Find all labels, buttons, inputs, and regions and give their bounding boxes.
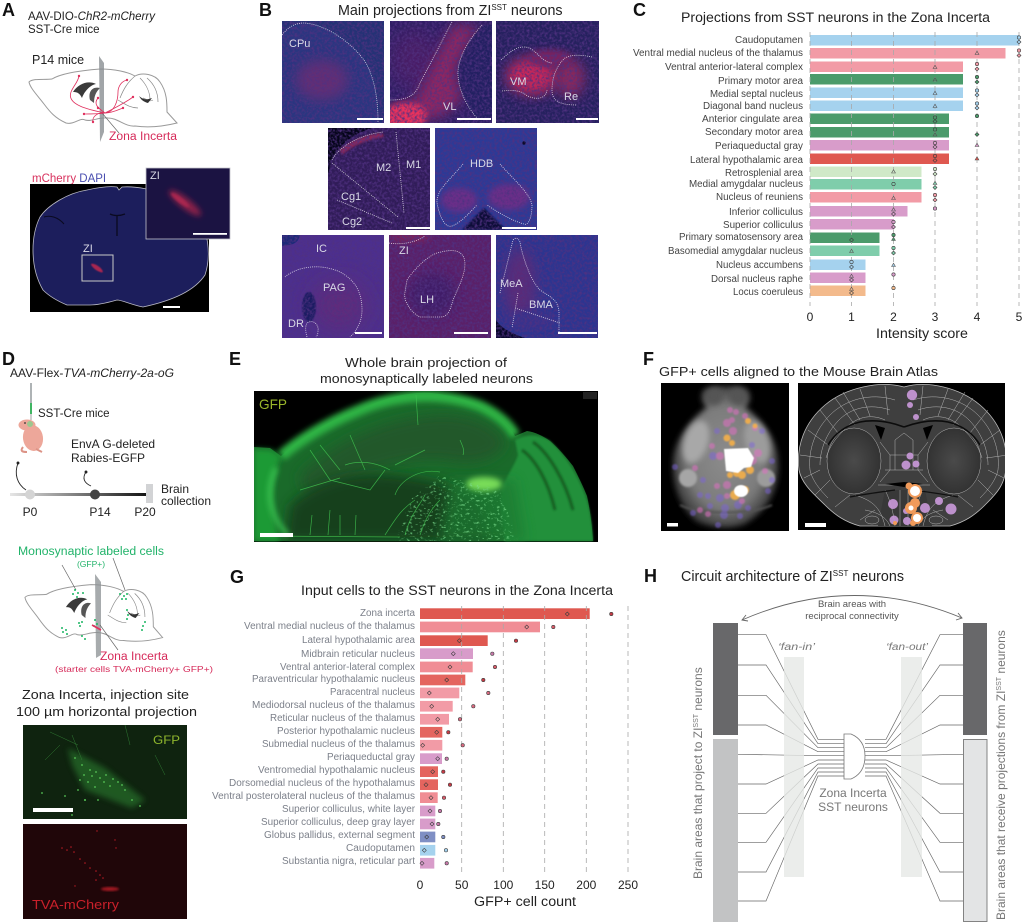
label: reciprocal connectivity: reciprocal connectivity [805, 611, 899, 622]
micrograph: IC PAG DR [282, 235, 384, 338]
micrograph: VL: VL [443, 101, 456, 113]
region labels: Superior colliculus [723, 220, 803, 231]
timeline labels: P0 [23, 505, 38, 519]
heading: horizontal projection: 100 µm horizontal projection [16, 704, 197, 719]
region labels: Dorsomedial nucleus of the hypothalamus [229, 778, 415, 789]
region labels: Ventromedial hypothalamic nucleus [258, 765, 415, 776]
micrograph: ZI LH: LH [420, 294, 434, 306]
panel A: viral tracing setup and injection site [2, 0, 230, 312]
micrograph: MeA BMA: BMA [529, 299, 554, 311]
micrograph: IC PAG DR: PAG [323, 282, 345, 294]
region labels: Zona incerta [360, 608, 416, 619]
x axis tick labels: 4 [974, 310, 981, 324]
region labels: Posterior hypothalamic nucleus [277, 726, 415, 737]
region labels: Diagonal band nucleus [703, 101, 803, 112]
vertical label: left: Brain areas that project to ZI [691, 728, 705, 879]
individual animal markers [850, 36, 1021, 295]
region labels: Lateral hypothalamic area [302, 635, 416, 646]
connection lines: fan-in [738, 635, 844, 901]
region labels: Inferior colliculus [729, 207, 803, 218]
micrograph: ZI LH: ZI [399, 245, 409, 257]
micrograph inset: zona incerta: ZI [150, 170, 160, 182]
connection lines: fan-out [865, 635, 963, 901]
region labels: Mediodorsal nucleus of the thalamus [252, 700, 415, 711]
panel B title: Main projections from ZI [338, 3, 491, 19]
region labels: Dorsal nucleus raphe [711, 274, 804, 285]
panel letter G: G [230, 567, 244, 587]
panel B title: neurons [507, 3, 563, 19]
panel E: whole brain GFP projection [229, 349, 598, 542]
micrograph: IC PAG DR: DR [288, 318, 304, 330]
region labels: Nucleus accumbens [716, 260, 803, 271]
label: Zona Incerta starter: Zona Incerta [100, 651, 169, 663]
block: upper left brain areas [713, 623, 738, 735]
region labels: Ventral anterior-lateral complex [665, 62, 803, 73]
region labels: Retrosplenial area [725, 168, 804, 179]
micrograph: M1 M2 Cg1 Cg2: M1 [406, 159, 421, 171]
region labels: Ventral medial nucleus of the thalamus [244, 621, 415, 632]
region labels: Ventral anterior-lateral complex [280, 662, 415, 673]
region labels: Paracentral nucleus [330, 687, 415, 698]
label: ZI on section: ZI [83, 243, 93, 255]
block: lower left brain areas [713, 739, 738, 922]
panel H: circuit architecture diagram [644, 566, 1008, 922]
virus and mouse line text: AAV-DIO-ChR2-mCherry [28, 11, 155, 23]
timeline labels: P14 [89, 505, 111, 519]
panel H title: SST [833, 569, 848, 578]
region labels: Primary motor area [718, 76, 804, 87]
x axis tick labels: 5 [1016, 310, 1023, 324]
label: GFP on micrograph: GFP [153, 733, 180, 747]
micrograph: HDB [435, 128, 537, 230]
arrow: injection at P0 [16, 462, 26, 490]
panel E title line 1: Whole brain projection of [345, 355, 507, 370]
region labels: Midbrain reticular nucleus [301, 649, 415, 660]
x axis tick labels: 200 [576, 878, 597, 892]
panel letter E: E [229, 349, 241, 369]
vertical label: right: neurons [994, 630, 1008, 677]
region labels: Substantia nigra, reticular part [282, 856, 415, 867]
region labels: Superior colliculus, deep gray layer [261, 817, 416, 828]
region labels: Secondary motor area [705, 127, 804, 138]
region labels: Periaqueductal gray [327, 752, 415, 763]
region labels: Lateral hypothalamic area [690, 155, 804, 166]
region labels: Basomedial amygdalar nucleus [668, 246, 803, 257]
icon: sagittal brain with labeled cells [25, 558, 163, 658]
label: brain collection: collection [161, 494, 211, 508]
region labels: Paraventricular hypothalamic nucleus [252, 674, 415, 685]
x axis tick labels: 150 [535, 878, 555, 892]
micrograph: M1 M2 Cg1 Cg2: Cg2 [342, 216, 362, 228]
micrograph: GFP injection site [23, 725, 187, 819]
panel letter C: C [633, 0, 646, 20]
micrograph: MeA BMA [496, 235, 598, 338]
label: Zona Incerta SST neurons: SST neurons [818, 800, 888, 814]
region labels: Globus pallidus, external segment [264, 830, 415, 841]
x axis tick labels [807, 310, 1023, 324]
panel D: rabies tracing workflow [2, 349, 213, 919]
vertical label: right: SST [996, 676, 1003, 691]
label: EnvA rabies: EnvA G-deleted [71, 437, 155, 451]
x axis tick labels: 0 [807, 310, 814, 324]
panel letter B: B [259, 0, 272, 20]
x axis title: Intensity score [876, 326, 968, 341]
image: coronal atlas overlay [798, 383, 1008, 530]
vertical label: right: Brain areas that receive projections from ZI [994, 691, 1008, 920]
dashed grid lines [462, 606, 628, 872]
icon: neonatal mouse pup [18, 420, 45, 452]
panel G title: Input cells to the SST neurons in the Zona Incerta [301, 583, 614, 598]
x axis tick labels: 100 [493, 878, 514, 892]
x axis tick labels: 250 [618, 878, 638, 892]
region labels: Submedial nucleus of the thalamus [262, 739, 415, 750]
region labels [633, 35, 804, 298]
label: Zona Incerta: Zona Incerta [109, 131, 178, 143]
label: SST-Cre mice: SST-Cre mice [38, 408, 110, 420]
panel letter H: H [644, 566, 657, 586]
label: fan-in: ‘fan-in’ [778, 642, 816, 653]
micrograph: VM and Re: Re [564, 91, 578, 103]
label: monosynaptic cells: Monosynaptic labeled cells [18, 546, 164, 558]
virus and mouse line text: SST-Cre mice [28, 24, 100, 36]
image: horizontal brain heatmap [661, 383, 789, 531]
label: starter cells: (starter cells TVA-mCherry+ GFP+) [55, 664, 213, 674]
legend: mCherry DAPI: mCherry DAPI [32, 173, 106, 185]
micrograph: TVA-mCherry [23, 824, 187, 919]
micrograph: M1 M2 Cg1 Cg2: Cg1 [341, 191, 361, 203]
region labels: Medial septal nucleus [710, 89, 803, 100]
individual count markers [420, 612, 613, 865]
timeline labels [23, 505, 156, 519]
panel B title: SST [491, 3, 507, 12]
timeline [10, 484, 153, 503]
panel letter D: D [2, 349, 15, 369]
panel letter F: F [643, 349, 654, 369]
label: brain collection: Brain [161, 482, 189, 496]
bars [420, 608, 590, 869]
panel H title: Circuit architecture of ZI [681, 569, 833, 585]
region labels: Caudoputamen [346, 843, 415, 854]
label: Zona Incerta SST neurons: Zona Incerta [819, 786, 887, 800]
timeline labels: P20 [134, 505, 156, 519]
label: EnvA rabies: Rabies-EGFP [71, 451, 145, 465]
x axis tick labels: 1 [848, 310, 855, 324]
region labels: Ventral posterolateral nucleus of the thalamus [212, 791, 415, 802]
micrograph: GFP whole brain [254, 391, 598, 542]
fan-in band [784, 657, 804, 877]
region labels: Anterior cingulate area [702, 114, 804, 125]
panel C: projection intensity bar chart [633, 0, 1023, 341]
micrograph: CPu: CPu [289, 38, 310, 50]
micrograph inset: zona incerta [146, 168, 230, 239]
x axis tick labels: 2 [890, 310, 897, 324]
virus text: AAV-Flex-TVA-mCherry-2a-oG [10, 368, 174, 380]
micrograph: IC PAG DR: IC [316, 243, 327, 255]
micrograph: VM and Re [496, 21, 599, 123]
label: GFP+: (GFP+) [77, 559, 105, 569]
block: upper right brain areas [963, 623, 987, 735]
region labels [212, 608, 416, 867]
micrograph: CPu [282, 21, 384, 123]
region labels: Reticular nucleus of the thalamus [270, 713, 415, 724]
label: reciprocal connectivity: Brain areas with [818, 599, 886, 610]
arrow: injection at P14 [84, 471, 91, 486]
micrograph: VL [390, 21, 492, 123]
panel G: input cells bar chart [212, 567, 638, 909]
micrograph: VM and Re: VM [510, 76, 526, 88]
icon: sagittal brain with zona incerta projections [29, 56, 177, 142]
region labels: Locus coeruleus [733, 287, 803, 298]
vertical label: left: SST [693, 713, 700, 728]
fan-out band [901, 657, 922, 877]
region labels: Ventral medial nucleus of the thalamus [633, 48, 803, 59]
icon: syringe [30, 383, 32, 420]
micrograph: HDB: HDB [470, 158, 493, 170]
label: fan-out: ‘fan-out’ [886, 642, 929, 653]
vertical label: left: neurons [691, 667, 705, 714]
micrograph: M1 M2 Cg1 Cg2 [328, 128, 430, 230]
label: GFP on whole brain: GFP [259, 396, 287, 412]
arrow: reciprocal connectivity [742, 595, 962, 621]
bars [810, 35, 1019, 296]
region labels: Medial amygdalar nucleus [689, 179, 803, 190]
x axis tick labels: 50 [455, 878, 469, 892]
micrograph: M1 M2 Cg1 Cg2: M2 [376, 162, 391, 174]
x axis tick labels: 3 [932, 310, 939, 324]
region labels: Primary somatosensory area [679, 232, 804, 243]
region labels: Caudoputamen [735, 35, 803, 46]
micrograph: MeA BMA: MeA [500, 278, 523, 290]
block: lower right brain areas [964, 740, 987, 922]
region labels: Nucleus of reuniens [716, 192, 803, 203]
x axis tick labels: 0 [417, 878, 424, 892]
dashed grid lines [810, 32, 1019, 306]
region labels: Superior colliculus, white layer [282, 804, 416, 815]
micrograph: coronal section [30, 184, 209, 312]
panel F: cells aligned to atlas [643, 349, 1008, 531]
panel B: main projections micrographs [259, 0, 599, 338]
panel F title: GFP+ cells aligned to the Mouse Brain Atlas [659, 365, 938, 379]
icon: zona incerta gate node [844, 734, 865, 779]
micrograph: ZI LH [388, 232, 491, 338]
label: P14 mice: P14 mice [32, 53, 84, 67]
region labels: Periaqueductal gray [715, 141, 803, 152]
panel E title line 2: monosynaptically labeled neurons [320, 371, 534, 386]
x axis tick labels [417, 878, 638, 892]
panel C title: Projections from SST neurons in the Zona Incerta [681, 10, 991, 25]
panel H title: neurons [848, 569, 904, 585]
panel letter A: A [2, 0, 15, 20]
heading: injection site: Zona Incerta, injection site [22, 687, 189, 702]
label: TVA-mCherry on micrograph: TVA-mCherry [32, 898, 120, 912]
x axis title: GFP+ cell count [474, 894, 576, 909]
